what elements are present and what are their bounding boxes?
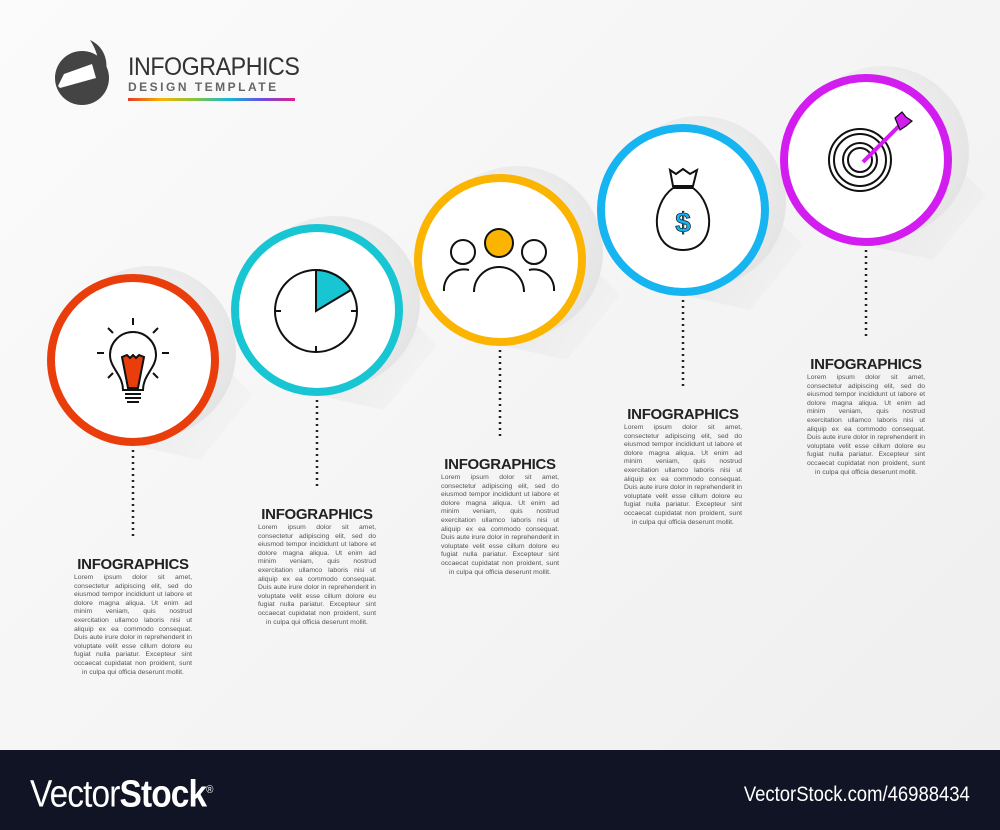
text block 2: Lorem ipsum dolor sit amet, consectetur adipiscing elit, sed do eiusmod tempor incididunt ut labore et dolore magna aliqua. Ut enim ad minim veniam, quis nostrud exercitation ullamco laboris nisi ut aliquip ex ea commodo consequat. Duis aute irure dolor in reprehenderit in voluptate velit esse cillum dolore eu fugiat nulla pariatur. Excepteur sint occaecat cupidatat non proident, sunt in culpa qui officia deserunt mollit. [258,524,376,626]
text block 2: INFOGRAPHICS [261,506,373,523]
icon: money bag [657,169,709,250]
step 3 circle [418,166,620,440]
footer bar: VectorStock® [30,774,212,816]
step 4 circle: $ [675,207,691,238]
step 1 circle [51,266,253,540]
logo: DESIGN TEMPLATE [128,80,279,94]
text block 3: INFOGRAPHICS [444,456,556,473]
text block 1: Lorem ipsum dolor sit amet, consectetur adipiscing elit, sed do eiusmod tempor incididunt ut labore et dolore magna aliqua. Ut enim ad minim veniam, quis nostrud exercitation ullamco laboris nisi ut aliquip ex ea commodo consequat. Duis aute irure dolor in reprehenderit in voluptate velit esse cillum dolore eu fugiat nulla pariatur. Excepteur sint occaecat cupidatat non proident, sunt in culpa qui officia deserunt mollit. [74,574,192,676]
text block 4: Lorem ipsum dolor sit amet, consectetur adipiscing elit, sed do eiusmod tempor incididunt ut labore et dolore magna aliqua. Ut enim ad minim veniam, quis nostrud exercitation ullamco laboris nisi ut aliquip ex ea commodo consequat. Duis aute irure dolor in reprehenderit in voluptate velit esse cillum dolore eu fugiat nulla pariatur. Excepteur sint occaecat cupidatat non proident, sunt in culpa qui officia deserunt mollit. [624,424,742,526]
text block 1: INFOGRAPHICS [77,556,189,573]
footer bar [0,750,1000,830]
step 2 circle [235,216,437,490]
step 4 circle [601,116,803,390]
text block 4: INFOGRAPHICS [627,406,739,423]
icon: target [829,112,912,191]
step 5 circle [784,66,986,340]
logo: INFOGRAPHICS [128,53,299,81]
text block 5: INFOGRAPHICS [810,356,922,373]
icon: people [444,229,554,292]
text block 3: Lorem ipsum dolor sit amet, consectetur adipiscing elit, sed do eiusmod tempor incididunt ut labore et dolore magna aliqua. Ut enim ad minim veniam, quis nostrud exercitation ullamco laboris nisi ut aliquip ex ea commodo consequat. Duis aute irure dolor in reprehenderit in voluptate velit esse cillum dolore eu fugiat nulla pariatur. Excepteur sint occaecat cupidatat non proident, sunt in culpa qui officia deserunt mollit. [441,474,559,576]
footer bar: VectorStock.com/46988434 [744,783,970,806]
text block 5: Lorem ipsum dolor sit amet, consectetur adipiscing elit, sed do eiusmod tempor incididunt ut labore et dolore magna aliqua. Ut enim ad minim veniam, quis nostrud exercitation ullamco laboris nisi ut aliquip ex ea commodo consequat. Duis aute irure dolor in reprehenderit in voluptate velit esse cillum dolore eu fugiat nulla pariatur. Excepteur sint occaecat cupidatat non proident, sunt in culpa qui officia deserunt mollit. [807,374,925,476]
logo [55,40,299,105]
icon: light bulb [97,318,169,402]
icon: clock [275,270,357,352]
